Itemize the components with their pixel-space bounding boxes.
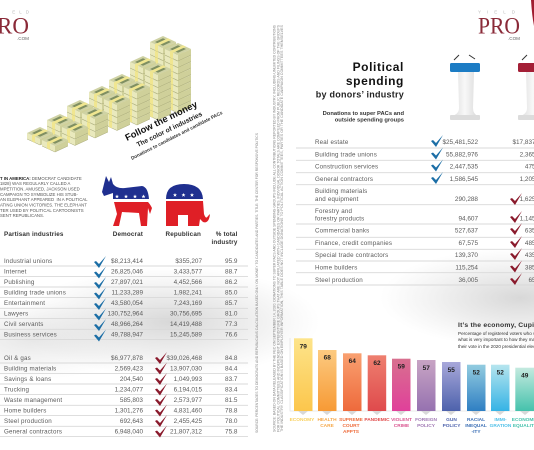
republican-leaning rows: 83.4	[225, 386, 238, 394]
blue check marks	[94, 256, 106, 342]
table rows: 67,575	[458, 240, 478, 247]
bar values: 52	[473, 370, 480, 376]
table header: Partisan industries	[4, 231, 64, 238]
bar labels: CARE	[320, 423, 335, 429]
bar values	[300, 344, 529, 380]
table header: Democrat	[113, 231, 144, 238]
heading: political spending	[316, 60, 404, 124]
table rows: forestry products	[315, 216, 364, 222]
bar values: 79	[300, 344, 307, 350]
text block: party symbols history: T IN AMERICA: DEMOCRAT CANDIDATE	[0, 176, 82, 181]
republican-leaning rows: $39,026,468	[166, 355, 202, 362]
bar values: 59	[398, 364, 405, 370]
democratic-leaning rows: 81.0	[225, 310, 238, 318]
bar values: 64	[349, 358, 356, 365]
table: political spending by industry	[296, 135, 534, 285]
icon: democratic donkey	[102, 176, 152, 226]
table rows: Real estate	[315, 139, 349, 146]
bar labels: POLICY	[443, 423, 461, 429]
chart heading: it's the economy	[458, 322, 534, 349]
democratic-leaning rows: $8,213,414	[111, 258, 143, 265]
heading: political spending: spending	[346, 74, 404, 88]
republican-leaning rows: 692,643	[120, 418, 143, 425]
democratic-leaning rows: 11,233,289	[111, 290, 143, 296]
republican-leaning rows: 1,234,077	[115, 386, 143, 394]
republican-leaning rows: Trucking	[4, 386, 29, 394]
democratic-leaning rows: 76.6	[225, 332, 238, 338]
bar labels: IMMI-	[494, 417, 507, 423]
bar labels: INEQUAL	[465, 423, 487, 429]
logo: right page: PRO	[478, 14, 520, 38]
democratic-leaning rows: Publishing	[4, 279, 35, 286]
text block: party symbols history: AN ELEPHANT APPEARED IN A POLITICAL	[0, 197, 88, 202]
republican-leaning rows: $6,977,878	[111, 355, 143, 362]
source note: left page: SOURCE: PERCENTAGES TO DEMOCRATS AND REPUBLICANS CALCULATION BASED ONLY ON MONEY TO CANDIDATES AND PARTIES. TITLE: THE CENTER FOR RESPONSIVE POLITICS	[255, 132, 259, 433]
republican-leaning rows: 78.8	[225, 408, 238, 414]
democratic-leaning rows: 49,788,947	[111, 332, 143, 338]
bar chart: voter priorities	[290, 338, 534, 435]
blue check marks	[431, 135, 443, 184]
republican-leaning rows: 585,803	[120, 397, 143, 404]
bar labels: POLICY	[417, 423, 436, 429]
democratic-leaning rows: 15,245,589	[170, 332, 202, 338]
republican-leaning rows: 1,301,276	[115, 408, 143, 414]
corner accent	[531, 0, 534, 26]
table header: % total	[216, 231, 238, 238]
bars	[294, 338, 534, 411]
republican-leaning rows: Savings & loans	[4, 376, 51, 383]
republican-leaning rows: Building materials	[4, 366, 56, 372]
democratic-leaning rows: Entertainment	[4, 300, 45, 307]
bar labels: ECONOMY	[290, 417, 315, 423]
republican-leaning rows: 78.0	[225, 418, 238, 425]
table rows: Special trade contractors	[315, 252, 388, 259]
text block: party symbols history: ATING UNION VICTORIES. THE ELEPHANT	[0, 202, 87, 207]
republican-leaning rows: 13,907,030	[170, 366, 202, 372]
bar labels: -ITY	[471, 429, 481, 435]
democratic-leaning rows: 27,897,021	[111, 279, 143, 286]
democratic-leaning rows: 130,752,964	[107, 310, 143, 318]
pointers under bars	[298, 411, 530, 415]
table header	[4, 231, 238, 246]
heading: political spending: by donors’ industry	[316, 90, 404, 100]
icon: red podium	[518, 55, 534, 120]
bar labels: VIOLENT	[391, 417, 412, 423]
table header: industry	[211, 239, 238, 246]
democratic-leaning rows: Internet	[4, 268, 27, 276]
democratic-leaning rows: 4,452,566	[174, 279, 202, 286]
table: partisan industries	[0, 231, 248, 438]
text block: party symbols history	[0, 176, 88, 218]
bar labels: RACIAL	[467, 417, 485, 423]
democratic-leaning rows: 86.2	[225, 279, 238, 286]
democratic-leaning rows: 77.3	[225, 321, 238, 328]
table rows: 36,005	[458, 277, 478, 284]
bar labels: FOREIGN	[415, 417, 437, 423]
logo: right page: .COM	[508, 36, 520, 41]
table rows: 55,882,976	[446, 152, 478, 158]
table rows: Building materials	[315, 188, 367, 195]
heading: political spending: outside spending groups	[335, 118, 404, 124]
democratic-leaning rows: 3,433,577	[174, 268, 202, 276]
table rows: Construction services	[315, 164, 378, 170]
text block: party symbols history: CAMPAIGN TO SYMBOLIZE HIS STUB-	[0, 192, 78, 197]
bar values: 68	[324, 354, 331, 362]
republican-leaning rows: 84.8	[225, 355, 238, 362]
democratic-leaning rows: Civil servants	[4, 321, 44, 328]
republican-leaning rows: 4,831,460	[174, 408, 202, 414]
republican-leaning rows	[4, 355, 238, 436]
republican-leaning rows: 2,455,425	[174, 418, 202, 425]
table rows: General contractors	[315, 176, 373, 183]
republican-leaning rows: 83.7	[225, 376, 238, 383]
democratic-leaning rows: 26,825,046	[111, 268, 143, 276]
bar labels: COURT	[342, 423, 360, 429]
bar values: 52	[497, 370, 504, 376]
bar values: 55	[448, 367, 455, 374]
table rows: 290,288	[455, 196, 478, 203]
bar labels: APPTS	[343, 429, 360, 435]
republican-leaning rows: Waste management	[4, 397, 62, 404]
heading: follow the money: Follow the money	[123, 99, 200, 143]
logo: left page	[0, 10, 33, 41]
democratic-leaning rows: Business services	[4, 332, 57, 338]
table rows: 94,607	[458, 216, 478, 222]
republican-leaning rows: 84.4	[225, 366, 238, 372]
republican-leaning rows: Steel production	[4, 418, 52, 425]
democratic-leaning rows	[4, 258, 238, 338]
democratic-leaning rows: 85.7	[225, 300, 238, 307]
heading: political spending: Donations to super PACs and	[323, 111, 404, 117]
republican-leaning rows: General contractors	[4, 428, 62, 436]
table rows: Steel production	[315, 277, 363, 284]
table rows: Building trade unions	[315, 152, 377, 158]
table rows: 139,370	[455, 252, 478, 259]
table rows: and equipment	[315, 196, 359, 203]
bar values: 49	[521, 372, 529, 380]
bar labels: SUPREME	[339, 417, 364, 423]
bar labels: GUN	[446, 417, 457, 423]
table rows: Home builders	[315, 264, 358, 272]
democratic-leaning rows: 14,419,488	[170, 321, 202, 328]
republican-leaning rows: 1,049,993	[174, 376, 202, 383]
table rows: $25,481,522	[442, 139, 478, 146]
democratic-leaning rows: 7,243,169	[174, 300, 202, 307]
text block: party symbols history: MPETITION. AMUSED, JACKSON USED	[0, 186, 80, 191]
table rows: 2,447,535	[450, 164, 478, 170]
democratic-leaning rows: 85.0	[225, 290, 238, 296]
red check marks	[155, 352, 167, 438]
table rows: Finance, credit companies	[315, 240, 392, 247]
logo: left page: .COM	[17, 36, 29, 41]
source note: right page	[272, 24, 284, 432]
democratic-leaning rows: 30,756,695	[170, 310, 202, 318]
logo: left page: ELD	[12, 10, 33, 14]
icon: stacks of money	[27, 36, 191, 152]
text block: party symbols history: SENT REPUBLICANS.	[0, 213, 44, 218]
bar values: 62	[373, 360, 381, 367]
republican-leaning rows: Oil & gas	[4, 355, 31, 362]
republican-leaning rows: Home builders	[4, 408, 46, 414]
text block: party symbols history: 1828) WAS REGULARLY CALLED A	[0, 181, 71, 186]
source note: right page: THE INDUSTRY CLASSIFICATION IS BASED ON EMPLOYER INFORMATION, THIS TABLE DOES NOT INCLUDE DONATIONS TO POLITICAL ACTION COMMITTEES, PARTIES OR THE CANDIDATE CAMPAIGN COMMITTEES THEMSELVES	[280, 24, 284, 432]
democratic-leaning rows: Building trade unions	[4, 290, 66, 296]
heading: political spending: Political	[353, 60, 404, 74]
republican-leaning rows: 75.8	[225, 428, 238, 436]
republican-leaning rows: 21,807,312	[170, 428, 202, 436]
democratic-leaning rows: 48,966,264	[111, 321, 143, 328]
heading: follow the money: Donations to candidates and candidate PACs	[130, 110, 224, 162]
republican-leaning rows: 2,569,423	[115, 366, 143, 372]
heading: follow the money: The color of industries	[136, 111, 204, 149]
bar labels: CRIME	[394, 423, 410, 429]
text block: party symbols history: TER USED BY POLITICAL CARTOONISTS	[0, 208, 84, 213]
democratic-leaning rows: 88.7	[225, 268, 238, 276]
republican-leaning rows: 2,573,977	[174, 397, 202, 404]
bar labels	[290, 417, 534, 435]
table rows: Commercial banks	[315, 228, 369, 234]
bar labels: HEALTH	[317, 417, 337, 423]
democratic-leaning rows: Industrial unions	[4, 258, 52, 265]
logo: right page: YIELD	[478, 10, 521, 14]
democratic-leaning rows: 43,580,054	[111, 300, 143, 307]
democratic-leaning rows: Lawyers	[4, 310, 28, 318]
democratic-leaning rows: $355,207	[175, 258, 202, 265]
table rows: 527,637	[455, 228, 478, 234]
table rows: 115,254	[455, 264, 478, 272]
democratic-leaning rows: 95.9	[225, 258, 238, 265]
table rows	[315, 139, 534, 284]
bar labels: PANDEMIC	[364, 417, 390, 423]
red check marks	[510, 193, 522, 285]
table header: Republican	[166, 231, 201, 238]
table rows: 1,586,545	[450, 176, 478, 183]
republican-leaning rows: 6,194,015	[174, 386, 202, 394]
icon: blue podium	[450, 55, 480, 120]
democratic-leaning rows: 1,982,241	[174, 290, 202, 296]
source note: right page: SOURCE: BASED ON DATA RELEASED BY THE FEC ON SEPTEMBER 14, 2020. DONATIONS TO SUPER PACS AND OUTSIDE SPENDING GROUPS INCLUDE ALL CONTRIBUTIONS REPORTED BY INDUSTRY, INCLUDING UNLIMITED CONTRIBUTIONS	[272, 24, 276, 432]
republican-leaning rows: 81.5	[225, 397, 238, 404]
republican-leaning rows: 204,540	[120, 376, 143, 383]
bar labels: GRATION	[490, 423, 512, 429]
republican-leaning rows: 6,948,040	[115, 428, 143, 436]
source note: right page: FOR POLITICAL COMMITTEES AND INDEPENDENT EXPENDITURE GROUPS THAT ARE NOT AFFILIATED WITH CANDIDATES OR PARTIES. INDIVIDUAL DONOR TOTALS ARE COMPILED FROM PUBLIC RECORDS AND FILINGS OF THE GROUPS	[276, 24, 280, 432]
bar values: 57	[423, 365, 430, 372]
icon: republican elephant	[166, 184, 210, 226]
table rows: Forestry and	[315, 208, 352, 215]
